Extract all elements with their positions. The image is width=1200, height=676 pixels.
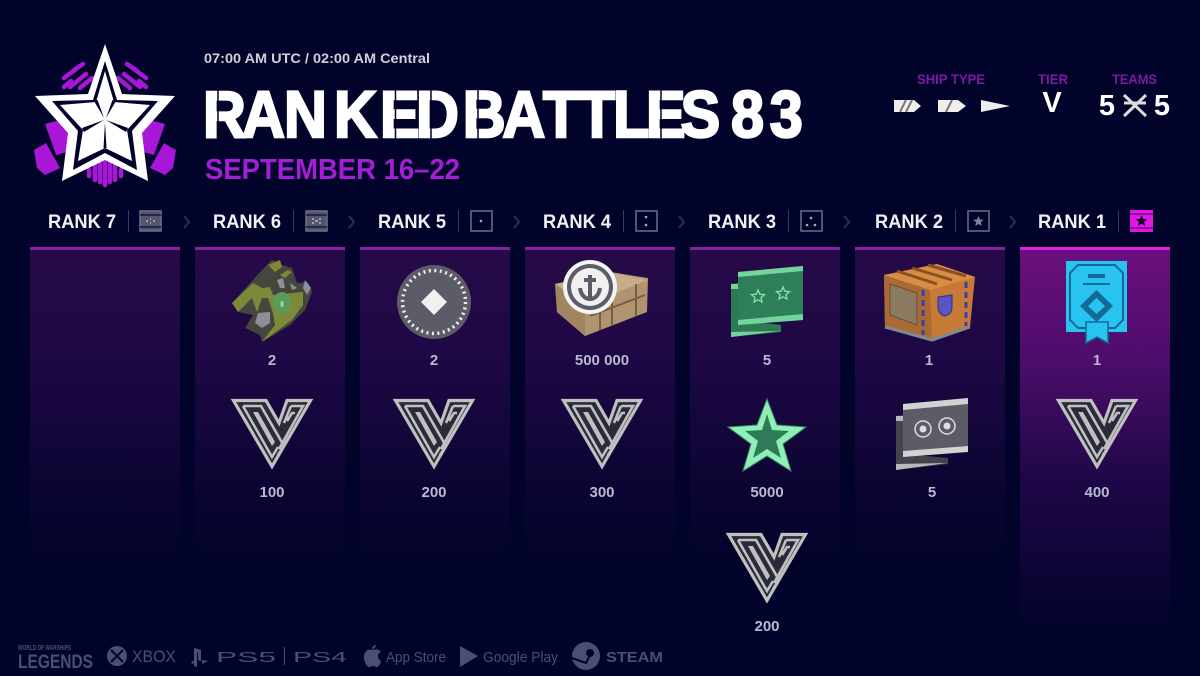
ship type legend: SHIP TYPE [917, 71, 985, 87]
rank 6 header: RANK 6 [213, 212, 281, 233]
arrow [349, 216, 354, 228]
arrow [844, 216, 849, 228]
logo: World of Warships Legends [18, 645, 93, 673]
value: 5 [763, 352, 771, 369]
icon: credits crate [555, 260, 648, 336]
value: 200 [421, 484, 447, 501]
icon: premium crate [884, 264, 975, 340]
teams: TEAMS [1112, 71, 1157, 87]
logo: Google Play [460, 646, 558, 667]
panel: rank 7 [30, 247, 180, 557]
icon: certificate [1066, 261, 1127, 343]
rank 2 header [875, 210, 989, 233]
logo: PS5 and PS4: PS4 [293, 649, 347, 666]
panel: rank 4 [525, 247, 675, 557]
icon: rank emblem [234, 400, 310, 466]
value: 200 [754, 618, 780, 635]
value: 2 [430, 352, 438, 369]
icon: grey signals [896, 398, 968, 470]
panel: rank 6 [195, 247, 345, 557]
value: 400 [1084, 484, 1110, 501]
arrow [679, 216, 684, 228]
panel: rank 2 [855, 247, 1005, 557]
panel: rank 3 [690, 247, 840, 635]
icon: green signals [731, 266, 803, 337]
teams [1099, 71, 1170, 122]
rank 2 header: RANK 2 [875, 212, 943, 233]
value: 5000 [750, 484, 784, 501]
tier [1038, 71, 1068, 119]
arrow [184, 216, 189, 228]
tier: V [1042, 87, 1062, 119]
icon: rank emblem [728, 534, 806, 600]
logo: World of Warships Legends: WORLD OF WARSHIPS [18, 645, 71, 652]
logo: PS5 and PS4: PS5 [216, 649, 276, 666]
date range: SEPTEMBER 16–22 [205, 154, 460, 186]
rank 3 header: RANK 3 [708, 212, 776, 233]
footer platform logos [18, 642, 663, 673]
rank 1 header [1038, 210, 1153, 233]
rank 3 header [708, 210, 822, 233]
rank 7 header [48, 210, 161, 233]
value: 500 000 [575, 352, 629, 369]
icon: green star [728, 399, 806, 471]
logo: App Store: App Store [386, 649, 446, 666]
rank 7 header: RANK 7 [48, 212, 116, 233]
logo: ranked star emblem [34, 44, 176, 185]
arrow [514, 216, 519, 228]
teams: 5 [1154, 90, 1170, 122]
panel: rank 5 [360, 247, 510, 557]
panel: rank 1 [1020, 247, 1170, 632]
icon: rank emblem [1058, 400, 1136, 466]
icon: rank emblem [564, 400, 640, 466]
icon: signal token [397, 265, 471, 339]
tier: TIER [1038, 71, 1068, 87]
rank 4 header: RANK 4 [543, 212, 611, 233]
icon: camouflage [232, 260, 312, 342]
arrow [1010, 216, 1015, 228]
logo: PS5 and PS4 [191, 647, 347, 667]
value: 100 [259, 484, 285, 501]
rank 5 header [378, 210, 492, 233]
icon: crossed swords [1124, 95, 1146, 116]
schedule time: 07:00 AM UTC / 02:00 AM Central [204, 50, 430, 66]
logo: App Store [364, 645, 446, 667]
ship type legend [894, 71, 1010, 112]
value: 1 [1093, 352, 1101, 369]
value: 5 [928, 484, 936, 501]
icon: ship type wedge [981, 100, 1010, 112]
rank 1 header: RANK 1 [1038, 212, 1106, 233]
title: RANKED BATTLES 83 [203, 78, 803, 152]
logo: Xbox [107, 646, 176, 666]
logo: Xbox: XBOX [132, 647, 176, 666]
teams: 5 [1099, 90, 1115, 122]
value: 300 [589, 484, 615, 501]
logo: World of Warships Legends: LEGENDS [18, 652, 93, 673]
logo: Steam: STEAM [606, 649, 663, 666]
rank 4 header [543, 210, 657, 233]
logo: Google Play: Google Play [483, 649, 558, 666]
rank 6 header [213, 210, 327, 233]
value: 2 [268, 352, 276, 369]
value: 1 [925, 352, 933, 369]
icon: ship type one stripe [938, 100, 966, 112]
logo: Steam [572, 642, 663, 670]
icon: ship type two stripes [894, 100, 921, 112]
rank 5 header: RANK 5 [378, 212, 446, 233]
icon: rank emblem [396, 400, 472, 466]
